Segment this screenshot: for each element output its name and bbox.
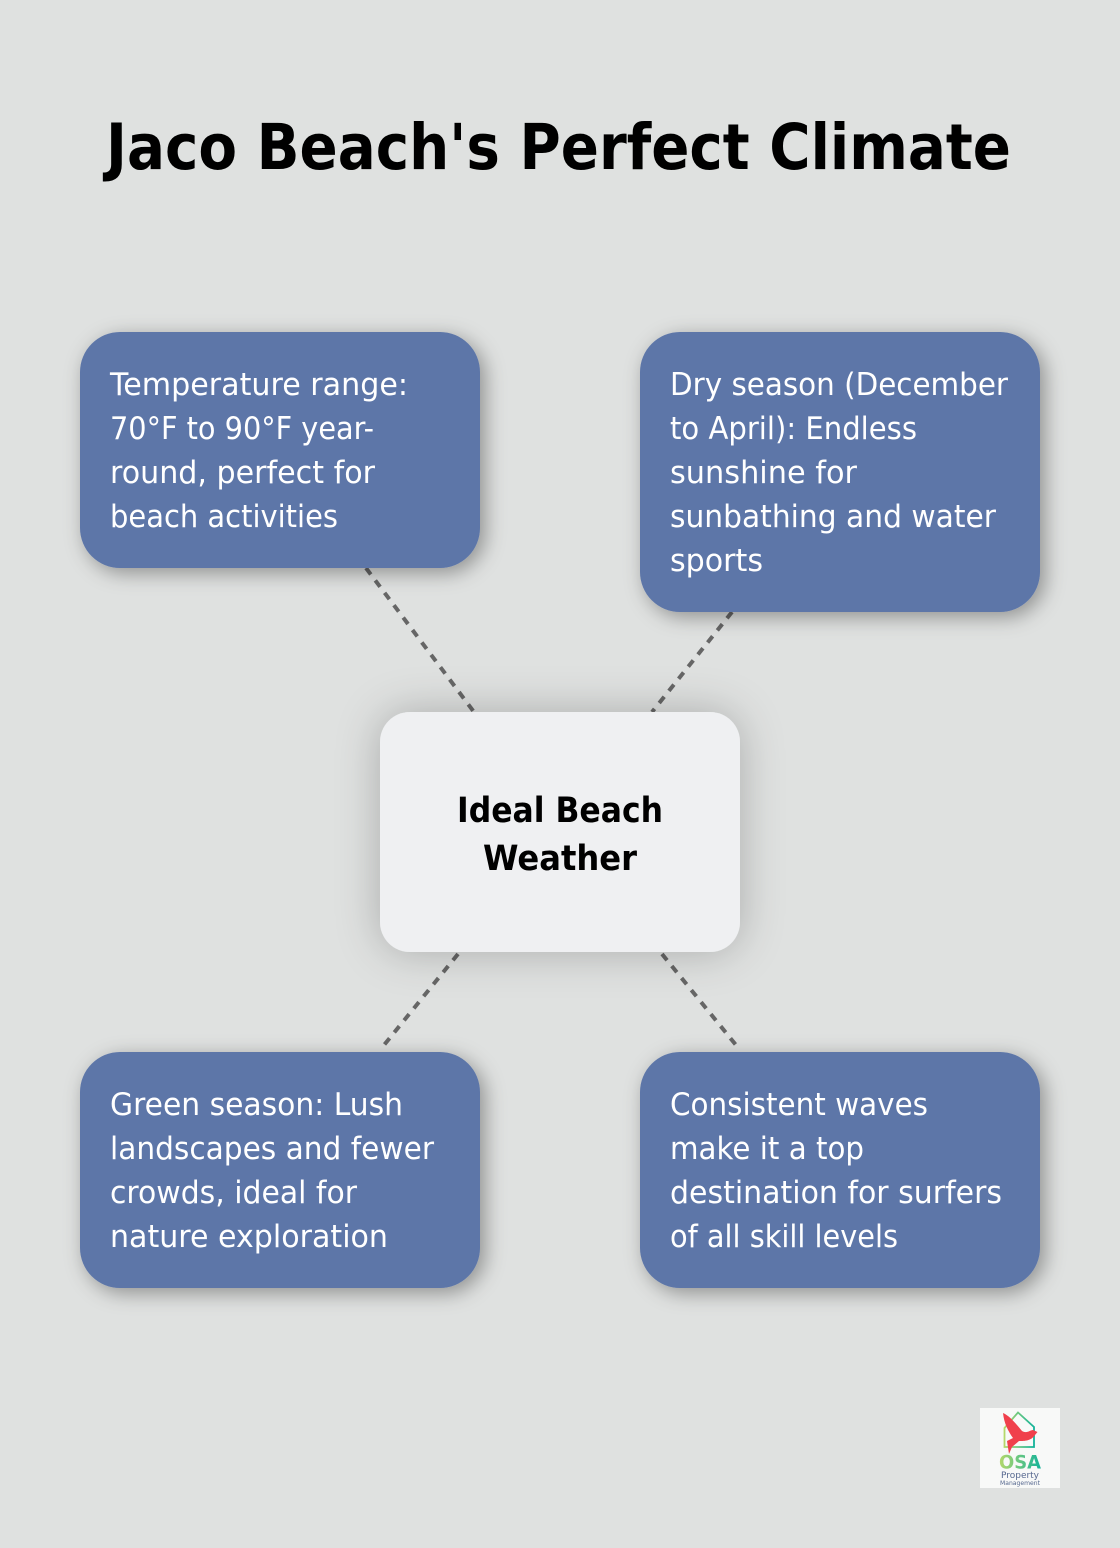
text: temperature range: beach activities (110, 499, 338, 535)
connector: green season to center (380, 954, 458, 1050)
text: dry season: sports (670, 543, 763, 579)
icon: red bird (1003, 1413, 1038, 1454)
text: dry season: sunbathing and water (670, 499, 996, 535)
panel: center ideal beach weather (380, 712, 740, 952)
text: temperature range: round, perfect for (110, 455, 375, 491)
panel: dry season (640, 332, 1040, 612)
text: green season: nature exploration (110, 1219, 388, 1255)
text: green season: Green season: Lush (110, 1087, 403, 1123)
panel: green season (80, 1052, 480, 1288)
logo: OSA Property Management (980, 1408, 1060, 1488)
text: green season: landscapes and fewer (110, 1131, 434, 1167)
text: dry season: Dry season (December (670, 367, 1008, 403)
text: green season: crowds, ideal for (110, 1175, 357, 1211)
logo subtitle second line: Management (1000, 1480, 1041, 1487)
connector: waves to center (662, 954, 740, 1050)
text: dry season: sunshine for (670, 455, 857, 491)
text: consistent waves: destination for surfers (670, 1175, 1002, 1211)
text: center heading: Ideal Beach (457, 791, 663, 831)
text: temperature range: Temperature range: (109, 367, 408, 403)
connector: temperature to center (366, 568, 474, 712)
text: center heading: Weather (483, 839, 638, 879)
panel: temperature range (80, 332, 480, 568)
title: Jaco Beach's Perfect Climate (102, 111, 1011, 184)
panel: consistent waves (640, 1052, 1040, 1288)
text: consistent waves: of all skill levels (670, 1219, 898, 1255)
icon: house outline (1004, 1412, 1034, 1447)
text: consistent waves: make it a top (670, 1131, 864, 1167)
text: dry season: to April): Endless (670, 411, 917, 447)
logo wordmark: OSA (999, 1452, 1041, 1474)
text: consistent waves: Consistent waves (670, 1087, 928, 1123)
logo subtitle: Property (1001, 1471, 1040, 1481)
text: temperature range: 70°F to 90°F year- (110, 411, 374, 447)
connector: dry season to center (652, 612, 732, 712)
